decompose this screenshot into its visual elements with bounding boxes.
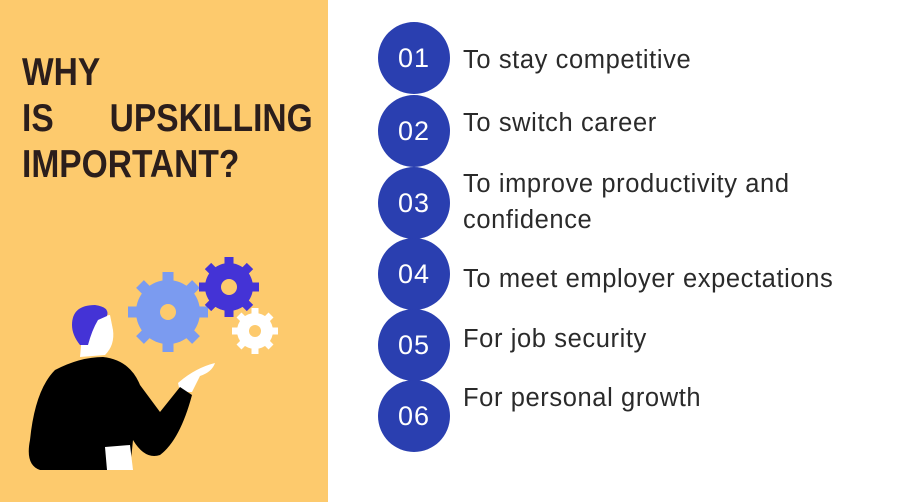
title: IS UPSKILLING	[22, 97, 313, 140]
text: For job security	[463, 325, 647, 353]
list item 01	[378, 22, 691, 94]
text: 04	[398, 259, 430, 289]
panel: left yellow	[0, 0, 328, 502]
illustration: person with gears	[28, 257, 278, 470]
text: To switch career	[463, 109, 657, 137]
text: To meet employer expectations	[463, 265, 833, 293]
text: 02	[398, 116, 430, 146]
title: WHY	[22, 51, 100, 94]
text: confidence	[463, 206, 592, 234]
list item 06	[378, 380, 701, 452]
text: 03	[398, 188, 430, 218]
title: IMPORTANT?	[22, 143, 239, 186]
text: For personal growth	[463, 384, 701, 412]
text: To stay competitive	[463, 46, 691, 74]
list item 05	[378, 310, 647, 380]
list item 02	[378, 95, 657, 167]
text: 06	[398, 401, 430, 431]
text: To improve productivity and	[463, 170, 790, 198]
list item 04	[378, 238, 833, 310]
text: 05	[398, 330, 430, 360]
title	[22, 51, 313, 186]
list item 03	[378, 167, 790, 238]
text: 01	[398, 43, 430, 73]
